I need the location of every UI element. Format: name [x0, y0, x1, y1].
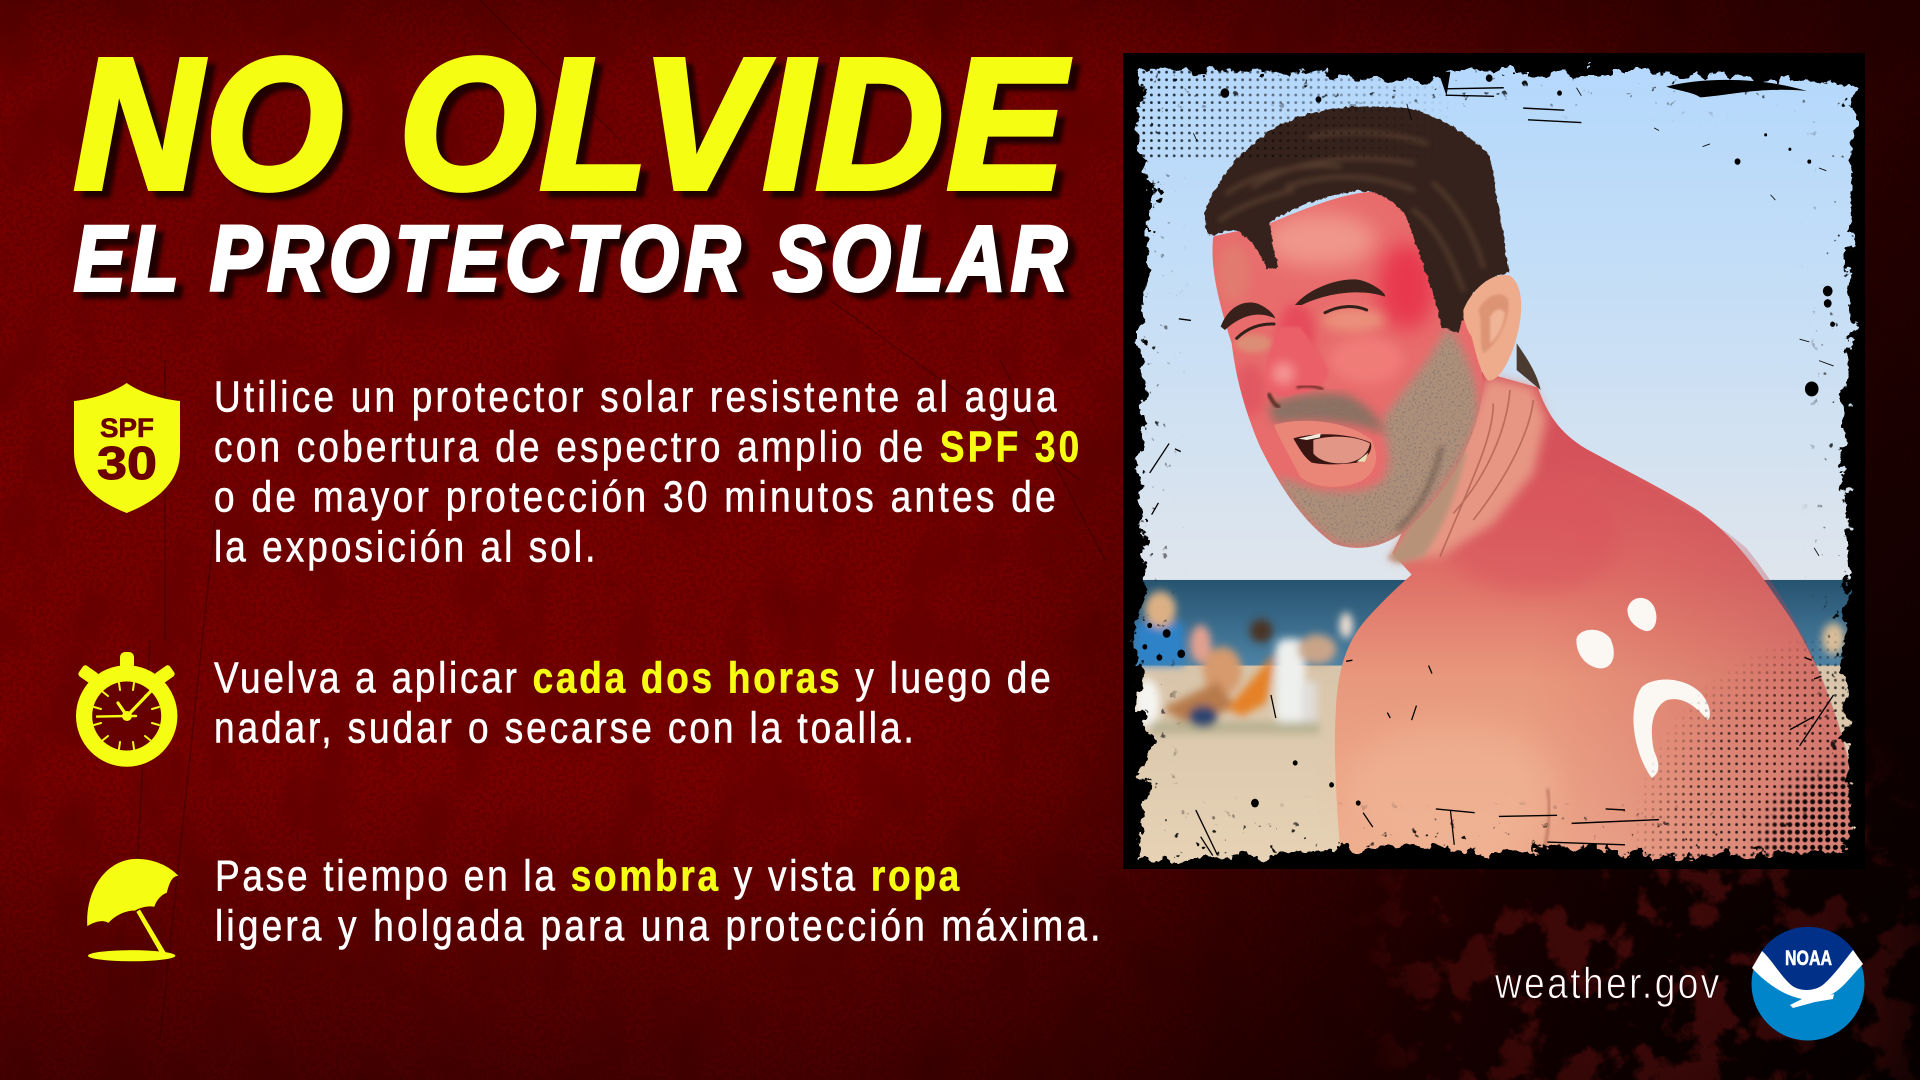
text block: water resistant sunscreen: [214, 371, 1079, 571]
text block: reapply every two hours: Vuelva a aplicar cada dos horas y luego de: [214, 652, 1051, 702]
text block: water resistant sunscreen: Utilice un protector solar resistente al agua: [214, 371, 1057, 421]
person: neck: [1387, 377, 1620, 593]
halftone dots: upper left: [1135, 70, 1448, 158]
photo background: sky sea and sand: [1121, 61, 1881, 880]
text block: shade and clothing: Pase tiempo en la sombra y vista ropa: [215, 850, 960, 900]
grunge speckle near frame edges: [1123, 53, 1865, 869]
person: face: [1212, 192, 1483, 548]
eyebrows: [1221, 279, 1385, 330]
website: weather.gov: weather.gov: [1494, 958, 1720, 1008]
person: hair: [1204, 106, 1541, 390]
icon: SPF 30 shield: 30: [97, 437, 157, 489]
mouth: [1274, 421, 1376, 487]
logo: NOAA: NOAA: [1785, 947, 1832, 970]
grunge splatter marks: [1142, 72, 1835, 807]
black grunge frame: [1090, 20, 1900, 900]
halftone dots: lower right: [1636, 634, 1852, 862]
person: back and shoulder: [1335, 371, 1853, 863]
text block: water resistant sunscreen: la exposición al sol.: [214, 521, 595, 571]
logo: NOAA: [1752, 927, 1864, 1040]
icon: SPF 30 shield: SPF: [100, 413, 154, 443]
panel: sunburned man photo with grunge frame: [1123, 53, 1865, 869]
text block: shade and clothing: ligera y holgada para una protección máxima.: [215, 900, 1100, 950]
sunscreen dabs: [1576, 598, 1710, 778]
text block: water resistant sunscreen: o de mayor protección 30 minutos antes de: [214, 471, 1056, 521]
text block: reapply every two hours: nadar, sudar o secarse con la toalla.: [214, 702, 914, 752]
person: ear: [1463, 275, 1521, 381]
icon: SPF 30 shield: [74, 383, 180, 513]
title: NO OLVIDE: NO OLVIDE: [74, 21, 1070, 228]
text block: shade and clothing: [215, 850, 1100, 950]
stubble beard: [1275, 327, 1478, 547]
text block: water resistant sunscreen: con cobertura de espectro amplio de SPF 30: [214, 421, 1079, 471]
subtitle: EL PROTECTOR SOLAR: EL PROTECTOR SOLAR: [74, 208, 1067, 311]
eyes: [1237, 307, 1367, 338]
face colour patches: [1217, 213, 1435, 417]
icon: stopwatch: [76, 652, 177, 767]
text block: reapply every two hours: [214, 652, 1051, 752]
nose: [1264, 327, 1328, 407]
icon: beach umbrella: [87, 859, 178, 961]
